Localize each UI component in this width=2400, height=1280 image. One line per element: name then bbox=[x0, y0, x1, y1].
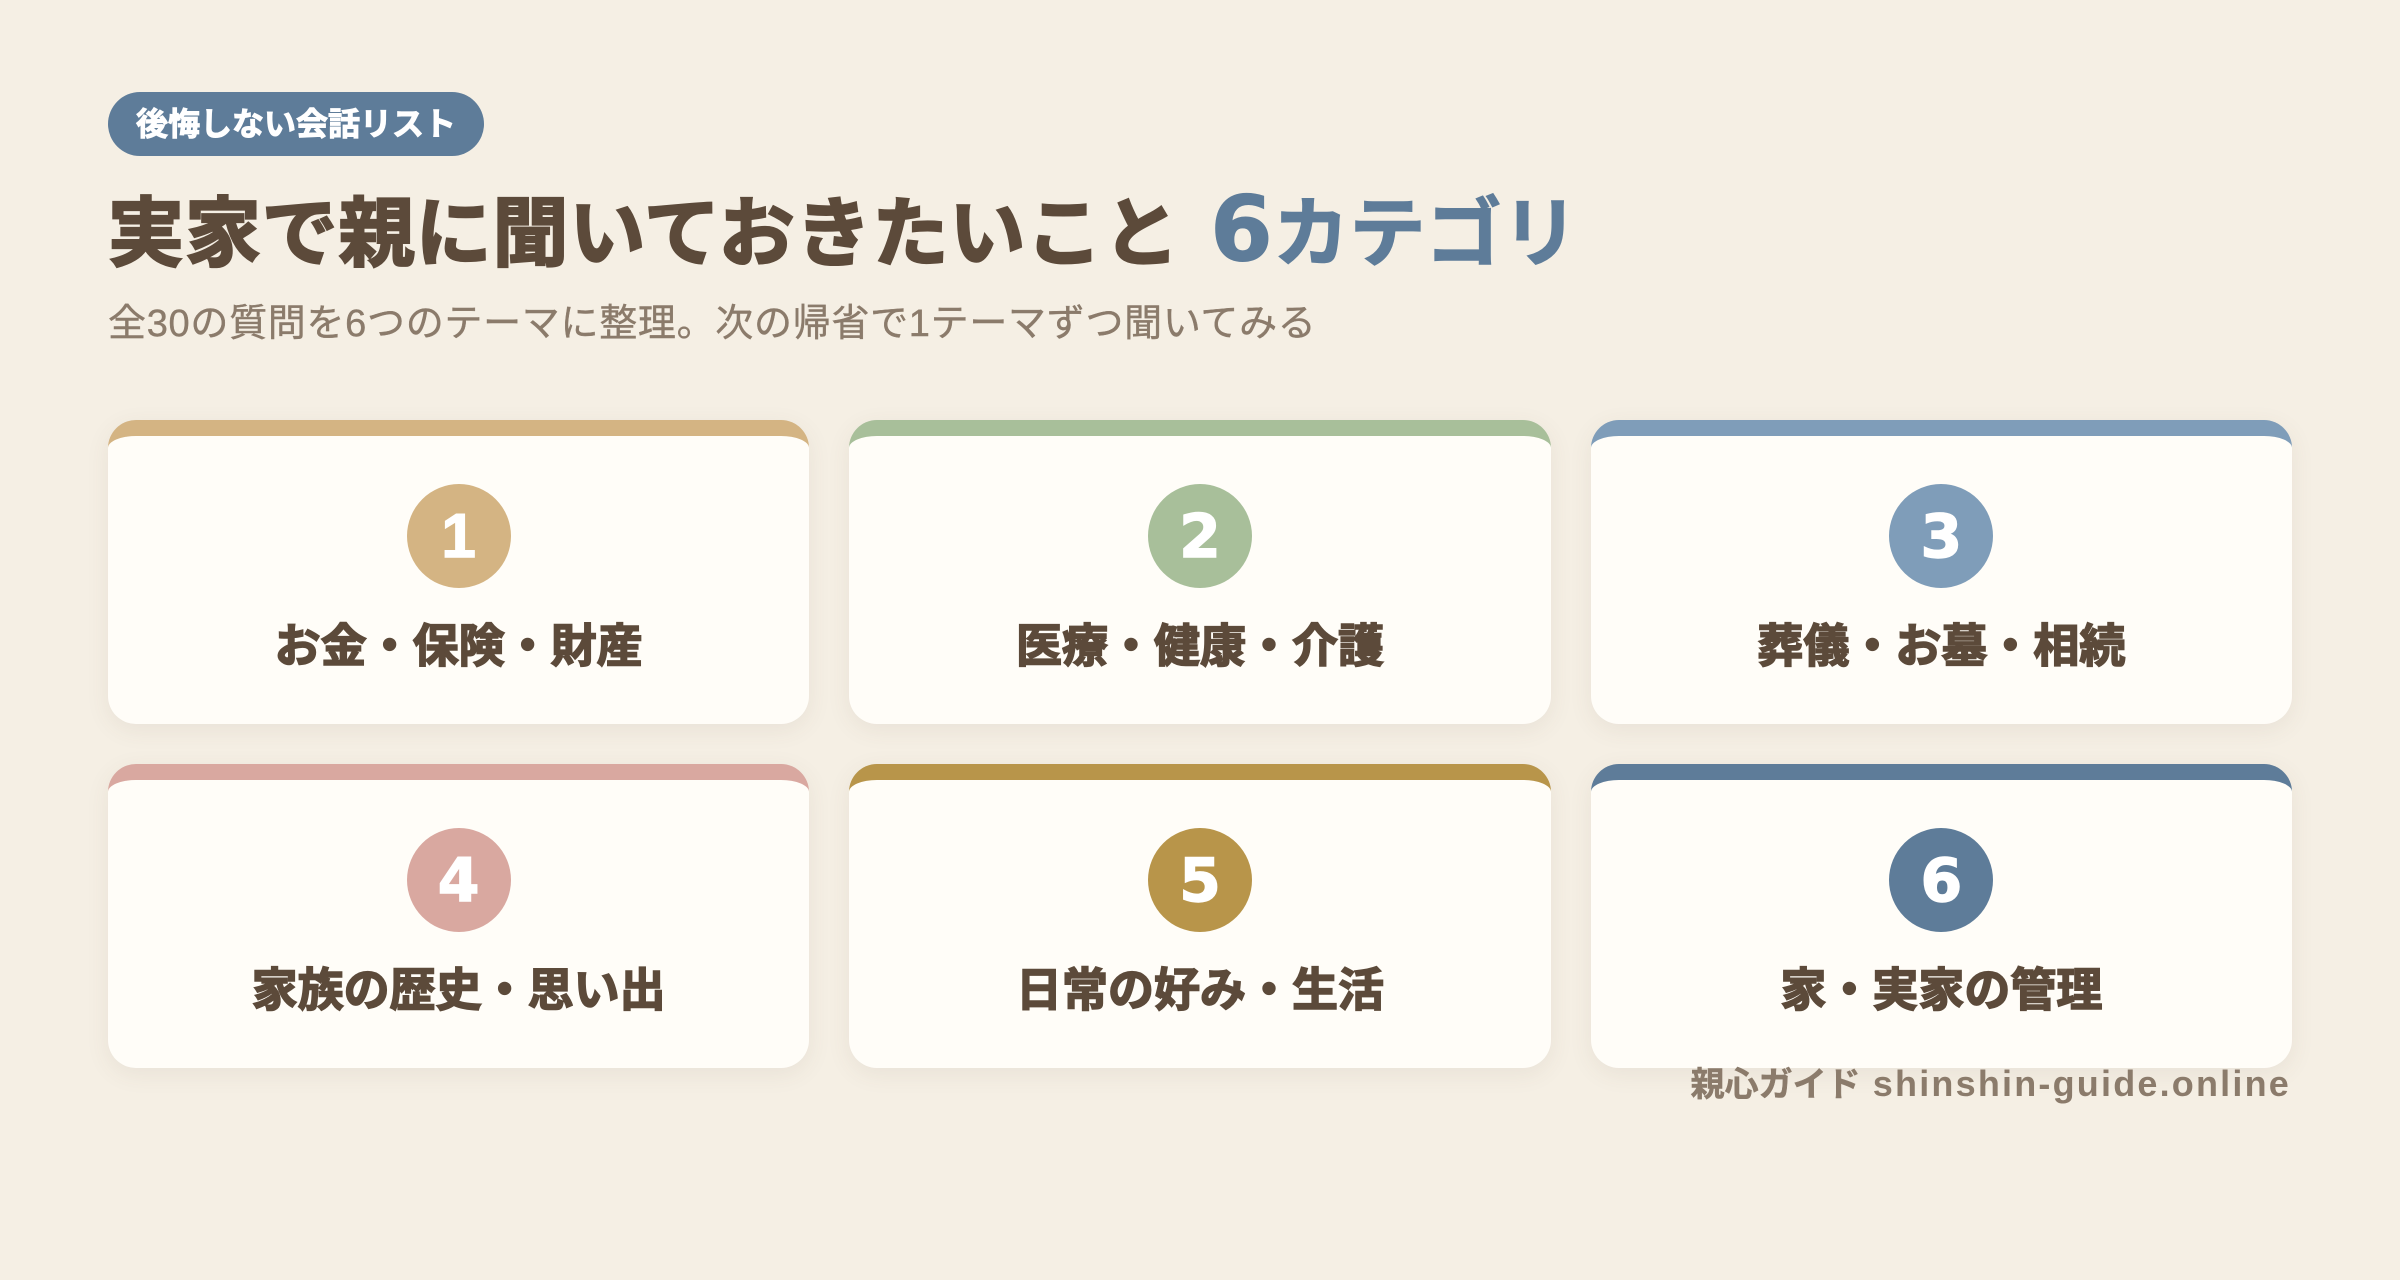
panel: category 3 bbox=[1591, 420, 2292, 724]
number badge 4 bbox=[407, 828, 511, 932]
number badge 3: 3 bbox=[1920, 502, 1962, 572]
panel: category 4 bbox=[108, 764, 809, 1068]
label: category 5: 日常の好み・生活 bbox=[1016, 964, 1384, 1016]
label: category 1: お金・保険・財産 bbox=[275, 620, 643, 672]
panel: category 2 bbox=[849, 420, 1551, 724]
number badge 1: 1 bbox=[441, 502, 476, 571]
number badge 6: 6 bbox=[1920, 846, 1962, 916]
number badge 2: 2 bbox=[1179, 502, 1221, 572]
number badge 1 bbox=[407, 484, 511, 588]
panel: category 5 bbox=[849, 764, 1551, 1068]
number badge 2 bbox=[1148, 484, 1252, 588]
panel: category 1 bbox=[108, 420, 809, 724]
label: category 4: 家族の歴史・思い出 bbox=[252, 964, 666, 1016]
badge: conversation list bbox=[108, 92, 484, 156]
number badge 6 bbox=[1889, 828, 1993, 932]
number badge 5 bbox=[1148, 828, 1252, 932]
subtitle: 全30の質問を6つのテーマに整理。次の帰省で1テーマずつ聞いてみる bbox=[108, 303, 1316, 345]
footer credit: 親心ガイド shinshin-guide.online bbox=[1691, 1063, 2291, 1104]
label: category 3: 葬儀・お墓・相続 bbox=[1757, 620, 2125, 672]
number badge 4: 4 bbox=[438, 846, 480, 916]
number badge 5: 5 bbox=[1179, 846, 1221, 916]
badge: conversation list: 後悔しない会話リスト bbox=[136, 106, 456, 142]
label: category 6: 家・実家の管理 bbox=[1780, 964, 2102, 1016]
panel: category 6 bbox=[1591, 764, 2292, 1068]
number badge 3 bbox=[1889, 484, 1993, 588]
title: 実家で親に聞いておきたいこと 6カテゴリ bbox=[108, 177, 1579, 282]
label: category 2: 医療・健康・介護 bbox=[1016, 620, 1384, 672]
